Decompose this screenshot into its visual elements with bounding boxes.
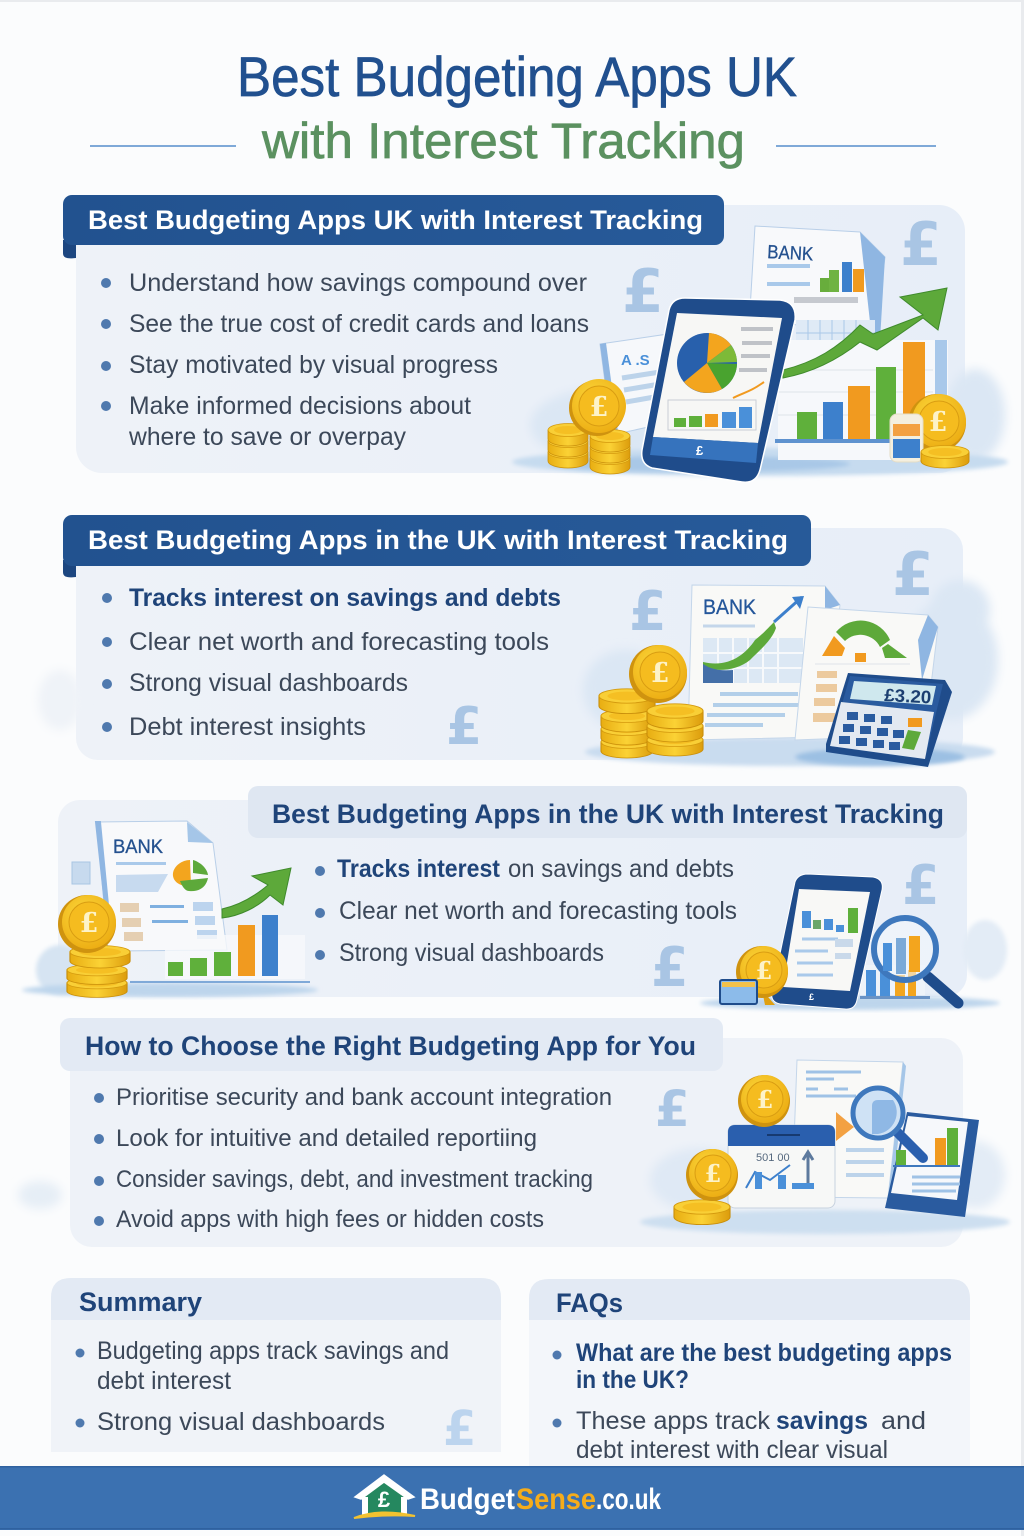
calculator: £3.20: [884, 685, 932, 707]
title: [90, 45, 936, 169]
panel: why interest tracking: [63, 195, 1008, 482]
coins: £: [80, 908, 98, 939]
panel heading: [63, 515, 811, 577]
calendar card: [728, 1125, 835, 1208]
panel heading: [248, 786, 967, 838]
bullet list: Make informed decisions about: [129, 392, 471, 420]
bullet list: Understand how savings compound over: [129, 269, 587, 297]
illustration: bank report, gauge, calculator, coins: £: [629, 580, 667, 643]
coin stacks: [599, 645, 703, 758]
questions and answers: debt interest with clear visual: [576, 1436, 888, 1464]
bullet list: Budgeting apps track savings and: [97, 1337, 449, 1365]
illustration: bank sheet, bars, arrow, coins: [22, 821, 318, 997]
report: [792, 1060, 906, 1198]
summary heading: Summary: [79, 1287, 202, 1317]
panel heading: [60, 1018, 723, 1071]
bullet list: [101, 269, 589, 451]
bullet list: [76, 1337, 449, 1436]
bank sheet: BANK: [113, 837, 163, 858]
illustration: phone, magnifier, coin, card: £: [902, 854, 940, 917]
magnifier: [874, 918, 958, 1003]
green growth arrow: [783, 288, 947, 378]
bank document: [750, 226, 885, 350]
illustration: phone, bank statement, chart, coins: [512, 210, 1008, 482]
FAQs heading: FAQs: [556, 1288, 623, 1318]
tablet: [885, 1112, 979, 1217]
panel: summary: [51, 1278, 501, 1457]
bullet list: Strong visual dashboards: [129, 669, 408, 697]
small document: [600, 334, 680, 435]
coin and jar: [890, 394, 969, 468]
panel: apps list with dark heading: [38, 515, 998, 767]
chart behind magnifier: [860, 965, 930, 999]
logo: wordmark: Budget: [420, 1483, 515, 1516]
coin stack and coin: £: [590, 392, 608, 423]
phone: [642, 298, 795, 482]
coin and card: [720, 946, 788, 1005]
phone: £: [696, 443, 704, 458]
questions and answers: and: [881, 1407, 926, 1435]
illustration: bank report, gauge, calculator, coins: £: [892, 540, 934, 610]
bar chart: [775, 340, 948, 460]
bullet list: Debt interest insights: [129, 713, 366, 741]
phone: [772, 874, 882, 1009]
green arrow: [222, 868, 291, 918]
questions and answers: [552, 1339, 952, 1464]
summary heading: [51, 1278, 501, 1320]
illustration: report, tablet, magnifier, coins: £: [655, 1080, 690, 1138]
bullet list: Avoid apps with high fees or hidden costs: [116, 1206, 544, 1233]
bullet list: Strong visual dashboards: [339, 939, 604, 967]
logo: house icon: £: [378, 1487, 391, 1512]
questions and answers: in the UK?: [576, 1366, 689, 1394]
title: Best Budgeting Apps UK: [237, 45, 797, 108]
illustration: report, tablet, magnifier, coins: [18, 1060, 1010, 1234]
logo: wordmark: [420, 1483, 661, 1516]
illustration: bank report, gauge, calculator, coins: £: [446, 697, 482, 757]
bullet list: where to save or overpay: [128, 423, 406, 451]
illustration: phone, bank statement, chart, coins: £: [900, 210, 942, 280]
coins: [58, 895, 130, 997]
calendar card: 501 00: [756, 1152, 790, 1164]
coin stacks: £: [651, 658, 669, 689]
bar chart: [130, 915, 310, 983]
bank document: BANK: [767, 242, 814, 265]
bank report: [688, 585, 840, 740]
illustration: phone, magnifier, coin, card: [651, 854, 1007, 1010]
panel heading: Best Budgeting Apps UK with Interest Tracking: [88, 205, 703, 235]
bullet list: Stay motivated by visual progress: [129, 351, 498, 379]
bullet list: Tracks interest: [337, 855, 501, 883]
bullet list: Prioritise security and bank account integration: [116, 1084, 612, 1111]
bullet list: Consider savings, debt, and investment tracking: [116, 1166, 593, 1193]
bullet list: [94, 1084, 612, 1233]
questions and answers: What are the best budgeting apps: [576, 1339, 952, 1367]
FAQs heading: [529, 1279, 970, 1320]
panel: FAQs: [529, 1279, 970, 1470]
bullet list: Tracks interest on savings and debts: [129, 584, 561, 612]
illustration: bank report, gauge, calculator, coins: [38, 540, 998, 767]
bullet list: Strong visual dashboards: [97, 1408, 385, 1436]
phone: £: [809, 992, 814, 1002]
bank report: BANK: [703, 596, 756, 619]
bullet list: on savings and debts: [508, 855, 734, 883]
icon: pound sign: £: [443, 1401, 476, 1457]
coin stack and coin: [548, 379, 630, 474]
coin and card: £: [756, 956, 772, 985]
bullet list: debt interest: [97, 1367, 231, 1395]
panel: apps list with light heading: [22, 786, 1007, 1010]
bullet list: [102, 584, 561, 741]
bullet list: See the true cost of credit cards and loans: [129, 310, 589, 338]
calculator: [826, 673, 952, 767]
panel heading: Best Budgeting Apps in the UK with Interest Tracking: [272, 799, 944, 829]
bullet list: Look for intuitive and detailed reportiing: [116, 1125, 537, 1152]
magnifier: [853, 1088, 923, 1158]
coins: £: [757, 1085, 773, 1114]
coins: [674, 1075, 790, 1225]
title: with Interest Tracking: [261, 113, 745, 169]
bank sheet: [96, 821, 227, 951]
bullet list: Clear net worth and forecasting tools: [339, 897, 737, 925]
illustration: phone, magnifier, coin, card: £: [651, 936, 689, 999]
panel heading: [63, 195, 724, 258]
gauge document: [795, 607, 938, 740]
logo: house icon: [354, 1475, 415, 1518]
pie chart: [677, 333, 737, 393]
bullet list: [315, 855, 737, 967]
small document: A .S: [621, 352, 650, 369]
panel heading: How to Choose the Right Budgeting App for You: [85, 1031, 696, 1061]
footer bar: [0, 1466, 1024, 1530]
coins: £: [705, 1159, 721, 1188]
logo: wordmark: Sense: [516, 1483, 596, 1516]
illustration: phone, bank statement, chart, coins: £: [622, 257, 664, 327]
logo: wordmark: .co.uk: [596, 1483, 661, 1516]
questions and answers: These apps track: [576, 1407, 771, 1435]
panel: how to choose: [18, 1018, 1010, 1247]
coin and jar: £: [929, 407, 947, 438]
panel heading: Best Budgeting Apps in the UK with Interest Tracking: [88, 525, 788, 555]
bullet list: Clear net worth and forecasting tools: [129, 628, 549, 656]
questions and answers: savings: [776, 1407, 868, 1435]
